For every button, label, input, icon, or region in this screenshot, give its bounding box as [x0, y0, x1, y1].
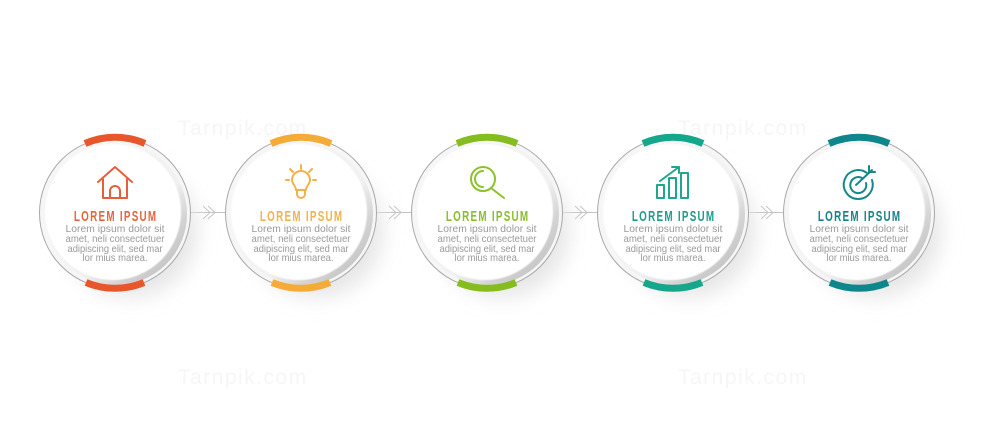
body text: adipiscing elit, sed mar	[68, 244, 163, 255]
heading: LOREM IPSUM	[260, 208, 342, 225]
watermarks: Tarnpik.com	[678, 366, 808, 389]
body text	[252, 224, 351, 264]
heading: LOREM IPSUM	[74, 208, 156, 225]
body text: amet, neli consectetuer	[438, 234, 537, 245]
body text	[66, 224, 165, 264]
connector arrow 1	[191, 206, 226, 219]
panel: step 4	[598, 137, 755, 297]
watermarks: Tarnpik.com	[178, 366, 308, 389]
top accent arc	[829, 137, 889, 144]
icon: target	[844, 166, 875, 199]
body text: Lorem ipsum dolor sit	[810, 224, 909, 235]
body text: adipiscing elit, sed mar	[254, 244, 349, 255]
body text: amet, neli consectetuer	[66, 234, 165, 245]
bottom accent arc	[458, 282, 516, 288]
heading: LOREM IPSUM	[818, 208, 900, 225]
icon: magnifying glass	[471, 167, 504, 198]
watermarks: Tarnpik.com	[678, 117, 808, 140]
body text: Lorem ipsum dolor sit	[438, 224, 537, 235]
top accent arc	[643, 137, 703, 144]
icon: light bulb	[286, 165, 316, 198]
body text: amet, neli consectetuer	[810, 234, 909, 245]
body text: lor mius marea.	[640, 253, 706, 264]
watermarks	[178, 117, 808, 389]
body text: adipiscing elit, sed mar	[626, 244, 721, 255]
body text: lor mius marea.	[454, 253, 520, 264]
body text: lor mius marea.	[826, 253, 892, 264]
heading: LOREM IPSUM	[446, 208, 528, 225]
connector arrow 4	[749, 206, 784, 219]
top accent arc	[457, 137, 517, 144]
bottom accent arc	[830, 282, 888, 288]
panel: step 5	[784, 137, 941, 297]
connector arrow 3	[563, 206, 598, 219]
body text: amet, neli consectetuer	[624, 234, 723, 245]
body text: Lorem ipsum dolor sit	[66, 224, 165, 235]
heading: LOREM IPSUM	[632, 208, 714, 225]
body text	[438, 224, 537, 264]
body text: Lorem ipsum dolor sit	[252, 224, 351, 235]
connector arrow 2	[377, 206, 412, 219]
icon: house	[98, 167, 132, 198]
watermarks: Tarnpik.com	[178, 117, 308, 140]
body text	[624, 224, 723, 264]
body text: amet, neli consectetuer	[252, 234, 351, 245]
body text	[810, 224, 909, 264]
panel: step 3	[412, 137, 569, 297]
bottom accent arc	[644, 282, 702, 288]
panel: step 1	[40, 137, 197, 297]
icon: bar chart	[657, 167, 688, 198]
body text: lor mius marea.	[268, 253, 334, 264]
body text: lor mius marea.	[82, 253, 148, 264]
panel: step 2	[226, 137, 383, 297]
top accent arc	[85, 137, 145, 144]
body text: Lorem ipsum dolor sit	[624, 224, 723, 235]
body text: adipiscing elit, sed mar	[440, 244, 535, 255]
bottom accent arc	[272, 282, 330, 288]
bottom accent arc	[86, 282, 144, 288]
top accent arc	[271, 137, 331, 144]
body text: adipiscing elit, sed mar	[812, 244, 907, 255]
